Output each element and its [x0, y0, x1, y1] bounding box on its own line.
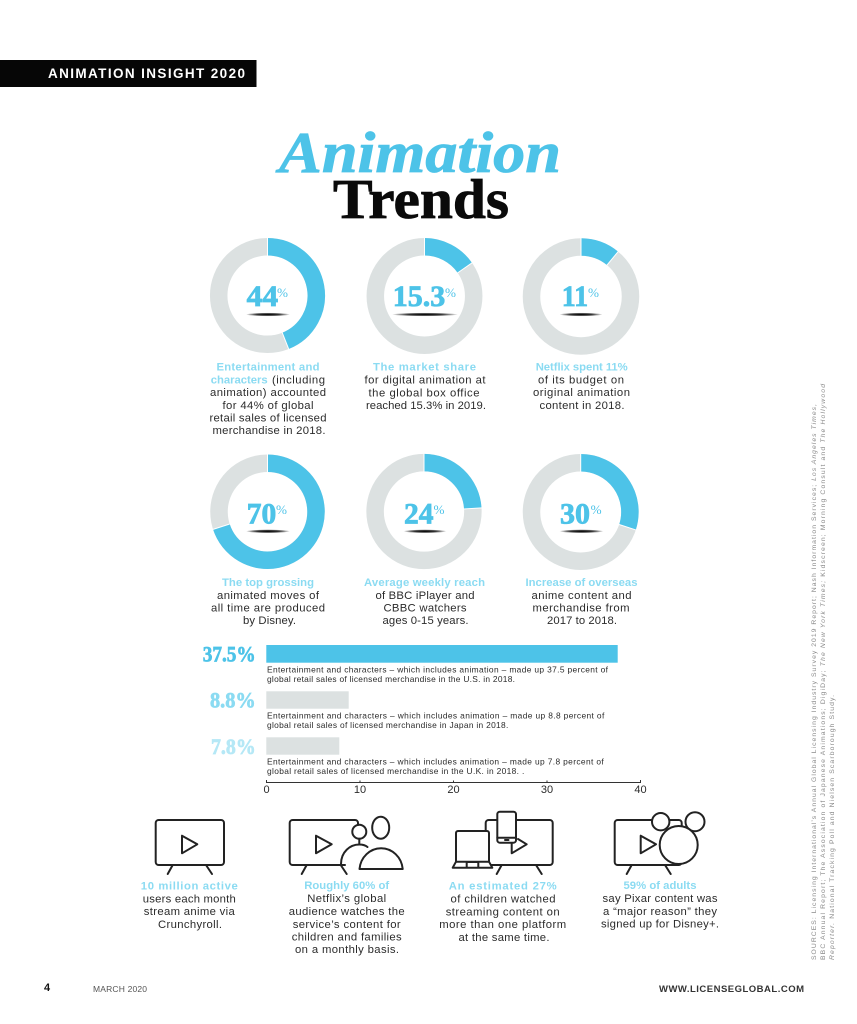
donut panel: 11%: content in 2018. — [540, 400, 624, 412]
text: roughly 60%: children and families — [292, 932, 402, 944]
donut panel: 70%: by Disney. — [243, 615, 296, 627]
bar: 7.8%: Entertainment and characters – which includes animation – made up 7.8 percent of — [267, 756, 604, 766]
bar: 37.5%: 37.5% — [203, 642, 256, 667]
icon: tv, phone and laptop — [453, 812, 553, 874]
donut panel: 15.3%: reached 15.3% in 2019. — [366, 400, 486, 412]
donut panel: 44%: merchandise in 2018. — [212, 425, 326, 437]
text: an estimated 27%: of children watched — [450, 894, 556, 906]
donut panel: 70% — [211, 452, 325, 627]
donut panel: 24%: CBBC watchers — [384, 602, 467, 614]
donut panel: 30%: Increase of overseas — [526, 577, 638, 589]
text: 59% of adults: a “major reason” they — [603, 906, 717, 918]
donut panel: 44% — [210, 236, 326, 437]
donut panel: 15.3% — [364, 236, 486, 412]
chart axis: 10 — [354, 784, 366, 796]
donut panel: 70%: animated moves of — [217, 590, 320, 602]
text: an estimated 27% — [439, 880, 566, 944]
text: an estimated 27%: at the same time. — [458, 932, 550, 944]
sources text: SOURCES: Licensing International’s Annual Global Licensing Industry Survey 2019 Report; Nash Information Services; Los Angeles Times, — [811, 404, 818, 960]
donut panel: 44%: % — [277, 285, 288, 300]
bar: 8.8% — [210, 688, 605, 730]
text: 10 million active: users each month — [143, 893, 236, 905]
donut panel: 11%: original animation — [533, 387, 630, 399]
donut panel: 44%: 44 — [247, 280, 278, 313]
bar: 37.5%: Entertainment and characters – which includes animation – made up 37.5 percent of — [267, 664, 609, 674]
text: 59% of adults — [601, 880, 719, 930]
title: Animation — [276, 120, 561, 185]
donut panel: 15.3%: the global box office — [368, 388, 480, 400]
donut panel: 30% — [526, 452, 638, 627]
donut panel: 70%: all time are produced — [211, 602, 325, 614]
text: an estimated 27%: streaming content on — [446, 906, 560, 918]
title — [276, 120, 561, 231]
bar: 8.8%: global retail sales of licensed merchandise in Japan in 2018. — [267, 720, 508, 730]
bar: 8.8%: 8.8% — [210, 688, 256, 713]
donut panel: 70%: % — [276, 502, 287, 517]
donut panel: 24%: Average weekly reach — [364, 577, 485, 589]
chart axis: 0 — [263, 784, 270, 796]
donut panel: 24%: % — [434, 502, 445, 517]
donut panel: 24%: ages 0-15 years. — [382, 615, 468, 627]
bar chart — [203, 642, 647, 796]
text: an estimated 27%: more than one platform — [439, 919, 566, 931]
bar: 8.8%: Entertainment and characters – which includes animation – made up 8.8 percent of — [267, 710, 605, 720]
sources text — [811, 384, 836, 960]
text: an estimated 27%: An estimated 27% — [449, 880, 557, 892]
donut panel: 15.3%: 15.3 — [393, 280, 445, 313]
text: roughly 60%: Roughly 60% of — [304, 880, 389, 892]
text: 10 million active: 10 million active — [141, 880, 238, 892]
donut panel: 11%: Netflix spent 11% — [536, 362, 628, 374]
icon: tv with play button — [156, 820, 224, 874]
chart axis: 20 — [447, 784, 460, 796]
donut panel: 24%: 24 — [404, 497, 434, 530]
donut panel: 70%: The top grossing — [222, 577, 314, 589]
donut panel: 11% — [532, 236, 630, 412]
text: 10 million active — [141, 880, 238, 931]
donut panel: 44%: characters — [211, 374, 268, 386]
icon: tv with mouse ears — [615, 812, 704, 874]
bar: 7.8%: 7.8% — [211, 734, 256, 759]
chart axis: 30 — [541, 784, 553, 796]
donut panel: 30%: 30 — [560, 497, 590, 530]
footer: page number: 4 — [44, 982, 51, 994]
donut panel: 15.3%: % — [445, 285, 456, 300]
text: 59% of adults: 59% of adults — [624, 880, 696, 892]
bar: 7.8% — [211, 734, 604, 776]
donut panel: 30%: 2017 to 2018. — [547, 615, 617, 627]
donut panel: 44%: for 44% of global — [222, 400, 314, 412]
donut panel: 30%: anime content and — [532, 590, 632, 602]
text: 59% of adults: say Pixar content was — [602, 893, 718, 905]
text: roughly 60%: on a monthly basis. — [295, 944, 399, 956]
sources text: Reporter. National Tracking Poll and Nielsen Scarborough Study. — [829, 695, 836, 960]
footer: website: WWW.LICENSEGLOBAL.COM — [659, 984, 804, 995]
donut panel: 24% — [364, 452, 485, 627]
title: Trends — [333, 169, 509, 231]
footer: date: MARCH 2020 — [93, 984, 147, 994]
text: roughly 60% — [289, 880, 405, 956]
text: 59% of adults: signed up for Disney+. — [601, 918, 719, 930]
text: roughly 60%: Netflix’s global — [307, 893, 386, 905]
text: 10 million active: Crunchyroll. — [158, 919, 222, 931]
chart axis — [263, 780, 647, 796]
header banner — [0, 60, 256, 87]
bar: 7.8%: global retail sales of licensed merchandise in the U.K. in 2018. . — [267, 766, 524, 776]
donut panel: 11%: of its budget on — [538, 374, 624, 386]
text: roughly 60%: audience watches the — [289, 906, 405, 918]
text: 10 million active: stream anime via — [144, 906, 236, 918]
text: roughly 60%: service’s content for — [293, 919, 401, 931]
sources text: BBC Annual Report; The Association of Japanese Animations; DigiDay; The New York Times; Kidscreen; Morning Consult and The Hollywood — [820, 384, 827, 960]
bar: 37.5% — [203, 642, 618, 684]
icon: tv with family — [290, 817, 403, 874]
donut panel: 30%: merchandise from — [532, 602, 630, 614]
donut panel: 15.3%: The market share — [373, 362, 476, 374]
donut panel: 15.3%: for digital animation at — [364, 374, 486, 386]
donut panel: 24%: of BBC iPlayer and — [376, 590, 474, 602]
header banner: ANIMATION INSIGHT 2020 — [48, 66, 245, 81]
donut panel: 11%: % — [588, 285, 599, 300]
donut panel: 11%: 11 — [562, 280, 588, 313]
donut panel: 44%: (including — [272, 374, 325, 386]
donut panel: 70%: 70 — [247, 497, 276, 530]
chart axis: 40 — [634, 784, 647, 796]
donut panel: 30%: % — [591, 502, 602, 517]
bar: 37.5%: global retail sales of licensed merchandise in the U.S. in 2018. — [267, 674, 515, 684]
donut panel: 44%: Entertainment and — [216, 362, 320, 374]
donut panel: 44%: animation) accounted — [210, 387, 326, 399]
donut panel: 44%: retail sales of licensed — [210, 412, 326, 424]
